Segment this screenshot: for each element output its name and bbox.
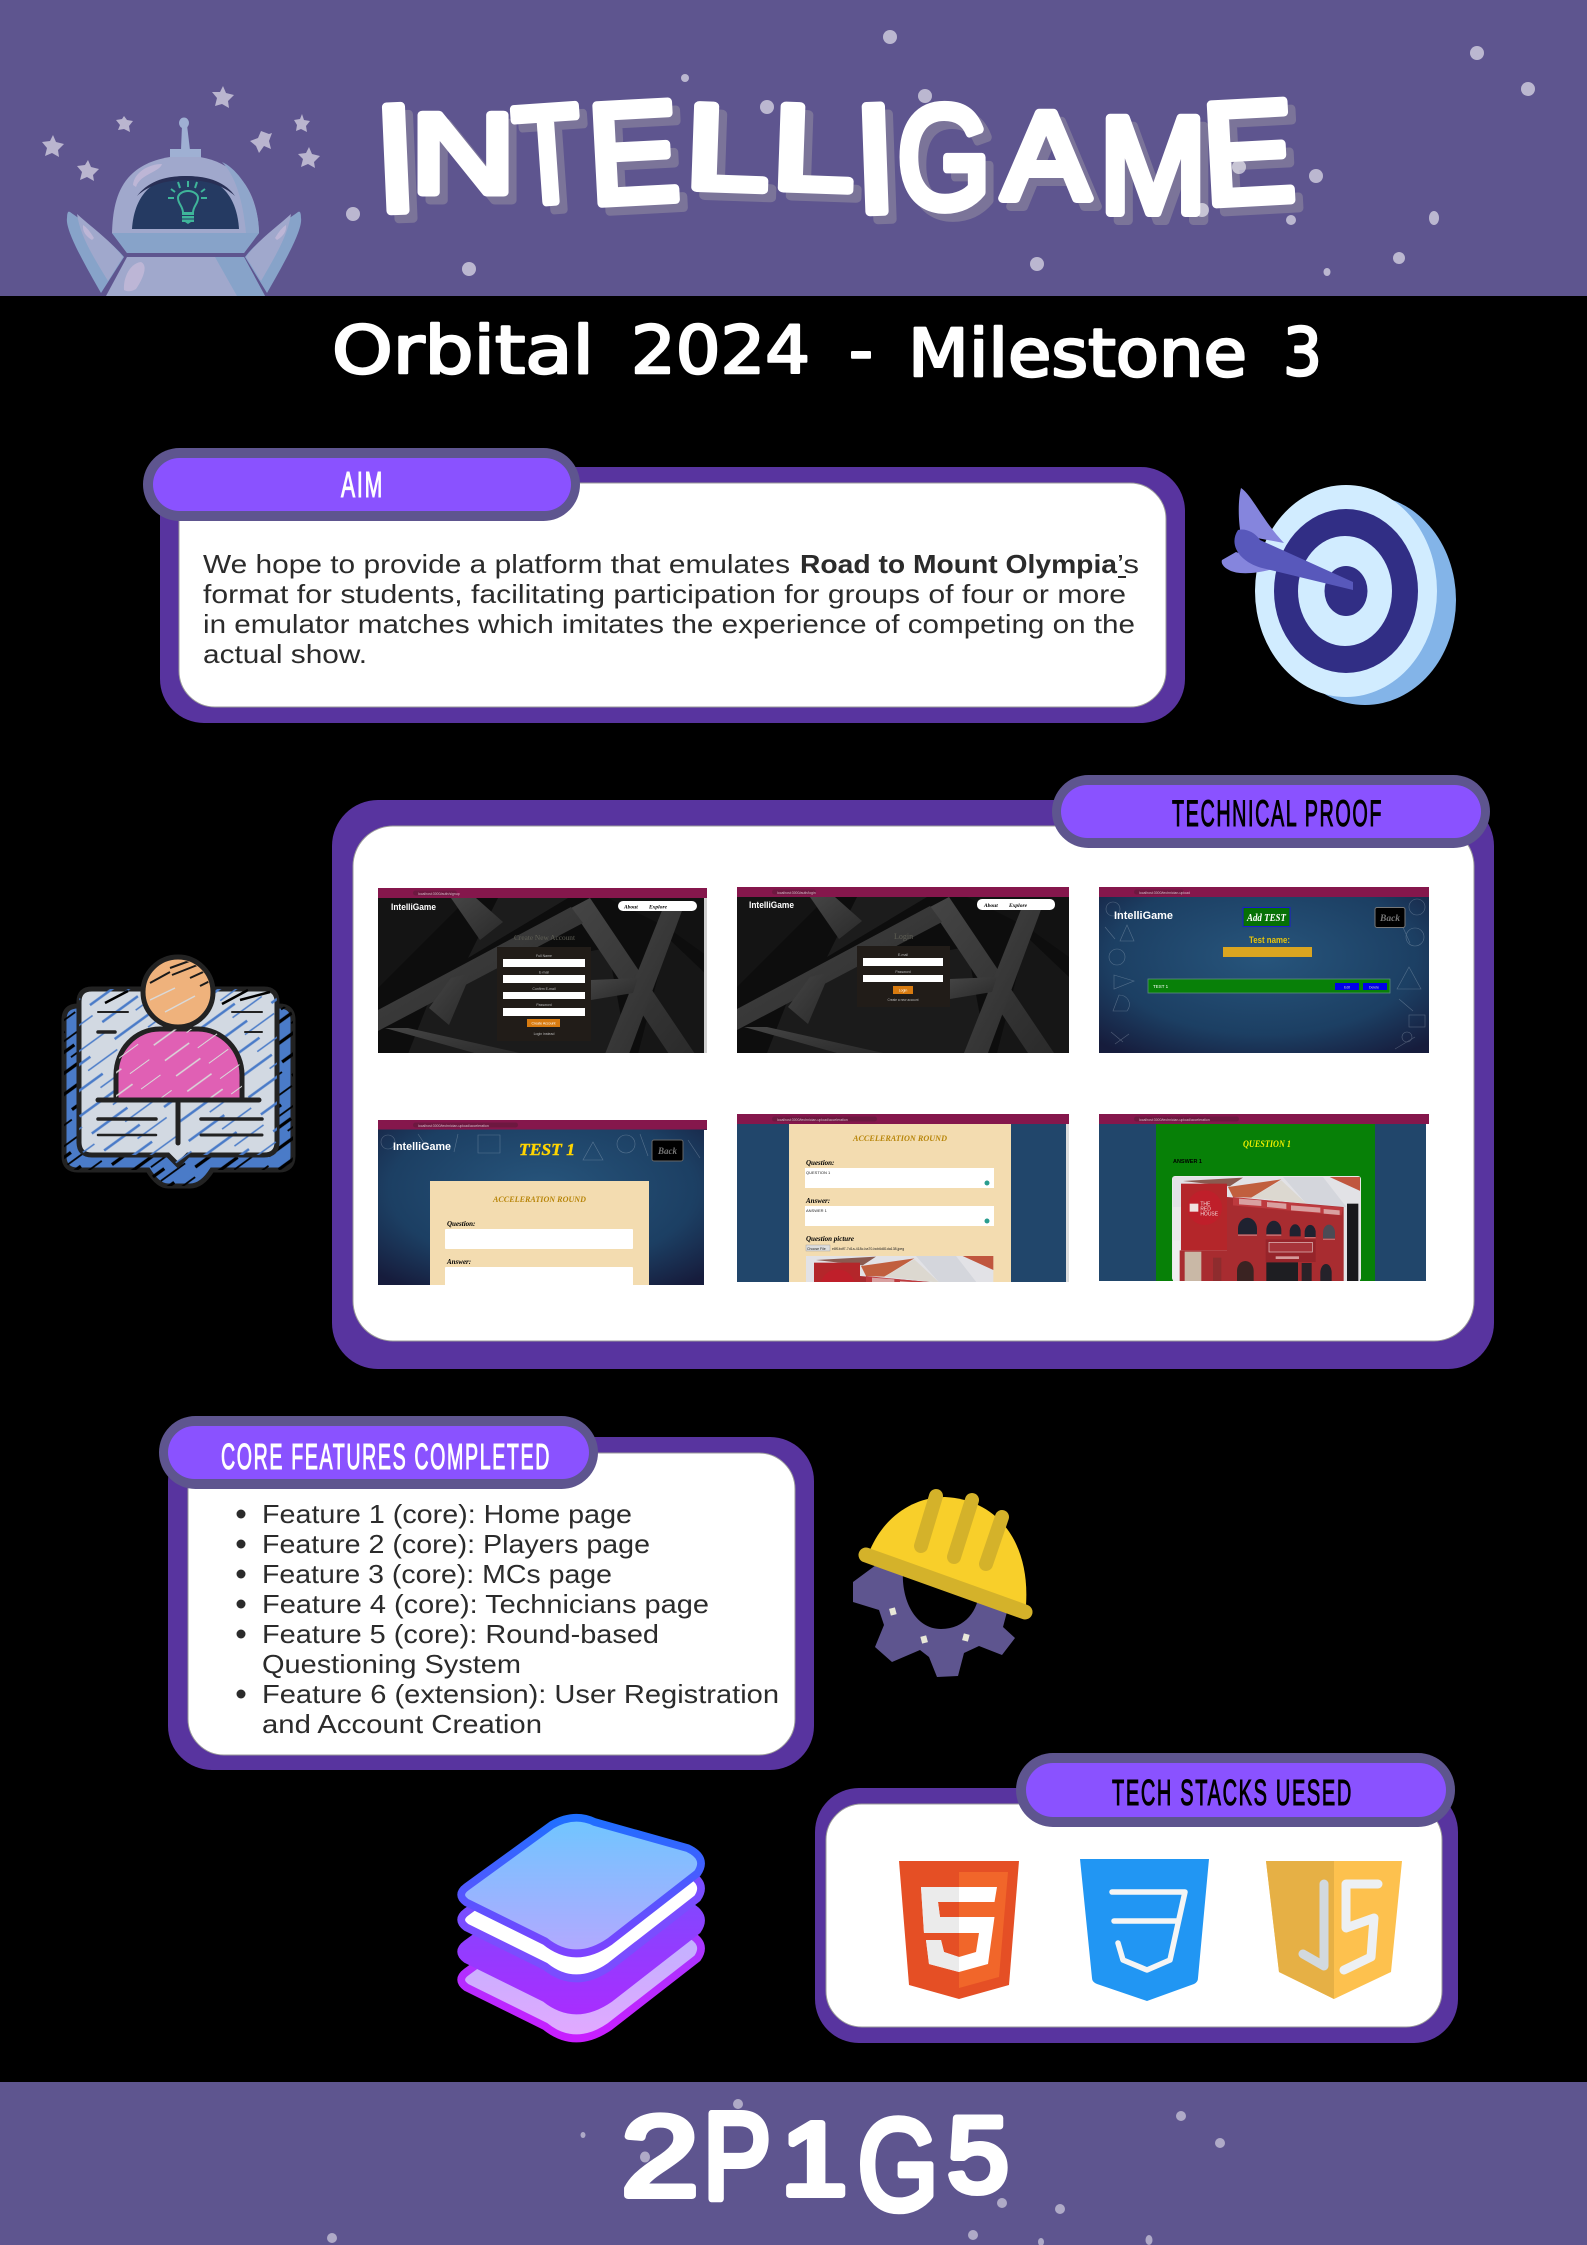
aim text: actual show. (203, 639, 367, 669)
screenshot: add test: Delete (1369, 986, 1379, 990)
screenshot: test form: Question: (447, 1220, 475, 1228)
feature list: Questioning System (262, 1649, 521, 1679)
footer band (0, 2082, 1587, 2245)
screenshot: add test: localhost:3000/technician-upload (1139, 891, 1190, 895)
title: I (851, 73, 899, 245)
title: E (1198, 69, 1299, 235)
screenshot: login: localhost:3000/auth/login (777, 891, 816, 895)
title: A (1003, 86, 1090, 225)
screenshot: add test: Test name: (1249, 935, 1290, 945)
screenshot: filled form: QUESTION 1 (806, 1170, 831, 1175)
screenshot: login: Create a new account (887, 998, 919, 1002)
screenshot: filled form: Answer: (805, 1197, 830, 1205)
screenshot: login: About (983, 903, 998, 909)
screenshot: filled form: Choose File (807, 1247, 826, 1251)
title: L (770, 81, 856, 216)
screenshot: filled form: ANSWER 1 (806, 1208, 828, 1213)
title: G (897, 76, 991, 240)
screenshot: test form: Answer: (446, 1258, 471, 1266)
building photo: RED (1200, 1206, 1211, 1212)
screenshot: create account: Login instead (534, 1032, 554, 1036)
screenshot: filled form: Question picture (806, 1235, 854, 1243)
screenshot: login: Login (894, 932, 913, 941)
icon: css3 (1080, 1859, 1209, 2001)
screenshot: add test: Edit (1344, 986, 1350, 990)
screenshot: create account (378, 888, 710, 1054)
feature list: Feature 1 (core): Home page (262, 1499, 632, 1529)
screenshot: question view: QUESTION 1 (1243, 1139, 1291, 1149)
screenshot: test form: IntelliGame (393, 1141, 451, 1153)
screenshot: add test: Add TEST (1246, 913, 1287, 924)
aim text: ’s (1117, 549, 1139, 579)
building photo: THE (1200, 1201, 1211, 1207)
title: L (684, 79, 771, 216)
feature list (236, 1499, 779, 1739)
screenshot: create account: Create New Account (514, 933, 576, 942)
screenshot: login: Password (895, 970, 911, 974)
icon: html5 (899, 1861, 1019, 1999)
technical proof heading: TECHNICAL PROOF (1172, 793, 1383, 834)
tech stacks heading: TECH STACKS UESED (1112, 1772, 1353, 1813)
icon: gear with hard hat (853, 1496, 1026, 1677)
panel: tech stacks (815, 1753, 1458, 2043)
building photo: HOUSE (1200, 1211, 1219, 1217)
title: E (584, 72, 683, 234)
title: T (509, 77, 586, 234)
header star dots (346, 30, 1535, 276)
screenshot: question view: localhost:3000/technician-upload/acceleration (1139, 1118, 1210, 1122)
screenshot: add test: TEST 1 (1153, 984, 1169, 989)
title (371, 69, 1299, 245)
screenshot: create account: Full Name (536, 954, 552, 958)
subtitle: - (849, 312, 873, 389)
feature list: Feature 3 (core): MCs page (262, 1559, 612, 1589)
feature list: and Account Creation (262, 1709, 542, 1739)
aim text: We hope to provide a platform that emulates (203, 549, 790, 579)
screenshot: create account: Create Account (532, 1022, 555, 1026)
panel: technical proof (332, 775, 1494, 1369)
feature list: Feature 2 (core): Players page (262, 1529, 650, 1559)
title: I (371, 73, 420, 243)
footer team code: 1 (781, 2102, 847, 2217)
screenshot: test form: ACCELERATION ROUND (492, 1195, 586, 1204)
screenshot: filled form: e8f1bdf7-7d1a-418c-ba70-bcb6d81da138.jpeg (832, 1247, 904, 1251)
feature list: Feature 5 (core): Round-based (262, 1619, 659, 1649)
subtitle: Milestone (908, 315, 1247, 392)
feature list: Feature 4 (core): Technicians page (262, 1589, 709, 1619)
feature list: Feature 6 (extension): User Registration (262, 1679, 779, 1709)
screenshot: test form: Back (657, 1146, 677, 1156)
icon: person reading open book (64, 957, 293, 1186)
screenshot: test form (378, 1120, 707, 1287)
panel: core features (159, 1416, 814, 1770)
screenshot: filled form: Question: (806, 1159, 834, 1167)
screenshot: login: Explore (1008, 903, 1028, 909)
screenshot: test form: localhost:3000/technician-upload/acceleration (418, 1124, 489, 1128)
footer team code: P (703, 2088, 771, 2225)
screenshot: filled form: ACCELERATION ROUND (852, 1134, 947, 1143)
screenshot: test form: TEST 1 (519, 1140, 575, 1159)
screenshot: login: E-mail (898, 953, 908, 957)
title: N (411, 91, 515, 217)
screenshot: create account: Confirm E-mail (532, 987, 556, 991)
aim text (203, 549, 1139, 669)
icon: stacked layers (461, 1818, 701, 2038)
screenshot: login: IntelliGame (749, 900, 794, 910)
aim text: Road to Mount Olympia (800, 549, 1118, 579)
screenshot: add test: IntelliGame (1114, 910, 1173, 922)
aim text: in emulator matches which imitates the experience of competing on the (203, 609, 1135, 639)
screenshot: create account: Explore (648, 904, 668, 910)
icon: target with dart (1222, 485, 1456, 705)
header band (0, 0, 1587, 296)
screenshot: filled form: localhost:3000/technician-upload/acceleration (777, 1118, 848, 1122)
panel: aim (143, 448, 1185, 723)
screenshot: add test: Back (1379, 914, 1400, 924)
screenshot: login: Login (899, 988, 907, 992)
screenshot: create account: localhost:3000/auth/signup (418, 892, 460, 896)
subtitle: 2024 (631, 312, 810, 389)
screenshot: create account: IntelliGame (391, 902, 436, 912)
subtitle (332, 312, 1322, 392)
footer star dots (327, 2099, 1225, 2245)
footer team code: 5 (947, 2096, 1009, 2215)
subtitle: Orbital (332, 312, 594, 389)
screenshot: filled form (737, 1114, 1069, 1360)
screenshot: create account: About (623, 904, 638, 910)
building photo (1172, 1176, 1361, 1281)
screenshot: login (737, 887, 1069, 1053)
footer team code: G (858, 2091, 938, 2237)
screenshot: question view: ANSWER 1 (1173, 1159, 1202, 1165)
footer team code (621, 2088, 1009, 2237)
screenshot: add test (1099, 887, 1429, 1053)
screenshot: question view (1099, 1114, 1429, 1281)
screenshot: create account: Password (536, 1003, 552, 1007)
title: M (1099, 90, 1207, 242)
aim heading: AIM (341, 464, 384, 505)
icon: robot with light bulb and stars (42, 86, 320, 296)
footer team code: 2 (621, 2092, 699, 2220)
core features heading: CORE FEATURES COMPLETED (221, 1436, 551, 1477)
aim text: format for students, facilitating participation for groups of four or more (203, 579, 1126, 609)
icon: javascript (1266, 1861, 1402, 1999)
screenshot: create account: E-mail (539, 970, 549, 974)
subtitle: 3 (1283, 314, 1322, 391)
